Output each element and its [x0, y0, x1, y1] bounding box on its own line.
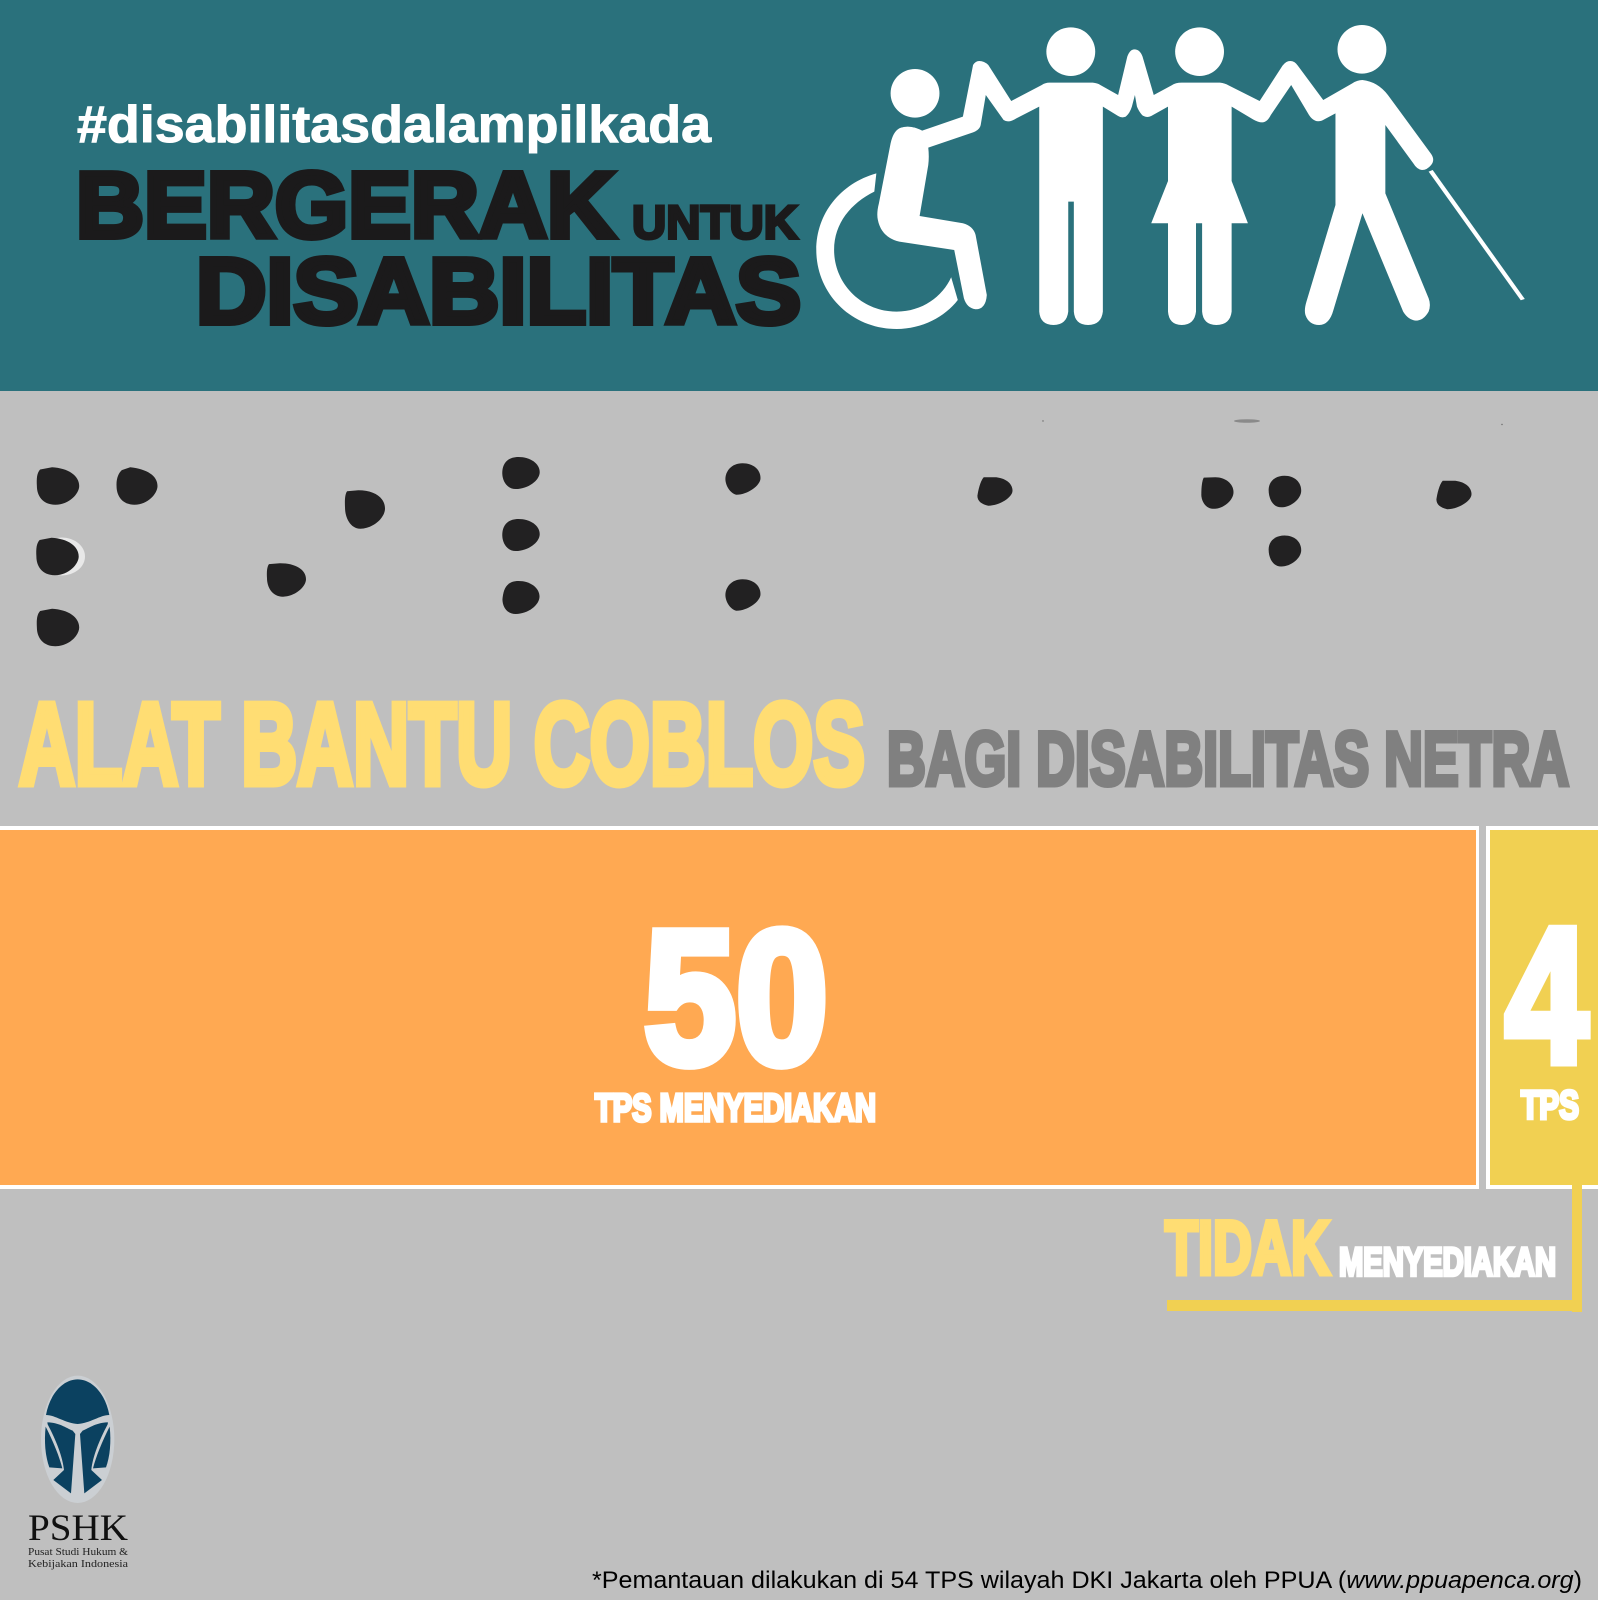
- heading: alat bantu coblos: ALAT BANTU COBLOS: [19, 679, 865, 809]
- panel: 50 TPS menyediakan: [0, 826, 1479, 1189]
- title: bergerak: BERGERAK: [76, 153, 615, 257]
- icon: linked bodies: [877, 49, 1433, 325]
- label: TPS: TPS: [1521, 1084, 1579, 1128]
- panel: 4 TPS: [1486, 826, 1598, 1189]
- logo: PSHK: [28, 1376, 128, 1570]
- braille dots: [36, 419, 1503, 646]
- logo wordmark: PSHK: [28, 1508, 128, 1549]
- number 50: 50: [644, 892, 828, 1104]
- hashtag: #disabilitasdalampilkada: [77, 96, 712, 154]
- logo subtitle line 2: Kebijakan Indonesia: [28, 1558, 128, 1570]
- title: disabilitas: DISABILITAS: [196, 239, 801, 343]
- panel: header banner: [0, 0, 1598, 391]
- icon: heads: [891, 25, 1386, 118]
- label: tidak: TIDAK: [1165, 1206, 1330, 1291]
- footnote: *Pemantauan dilakukan di 54 TPS wilayah DKI Jakarta oleh PPUA ( www.ppuapenca.org ): [592, 1567, 1582, 1594]
- logo subtitle line 1: Pusat Studi Hukum &: [28, 1546, 128, 1558]
- icon: group of people with disabilities: [816, 25, 1525, 329]
- braille dot highlight: [39, 538, 85, 576]
- icon: white cane: [1429, 170, 1525, 300]
- logo emblem: [41, 1376, 114, 1503]
- icon: wheelchair wheel: [816, 173, 958, 329]
- title: untuk: UNTUK: [632, 196, 798, 248]
- connector bracket: [1167, 1185, 1582, 1312]
- label: TPS menyediakan: TPS MENYEDIAKAN: [595, 1087, 876, 1130]
